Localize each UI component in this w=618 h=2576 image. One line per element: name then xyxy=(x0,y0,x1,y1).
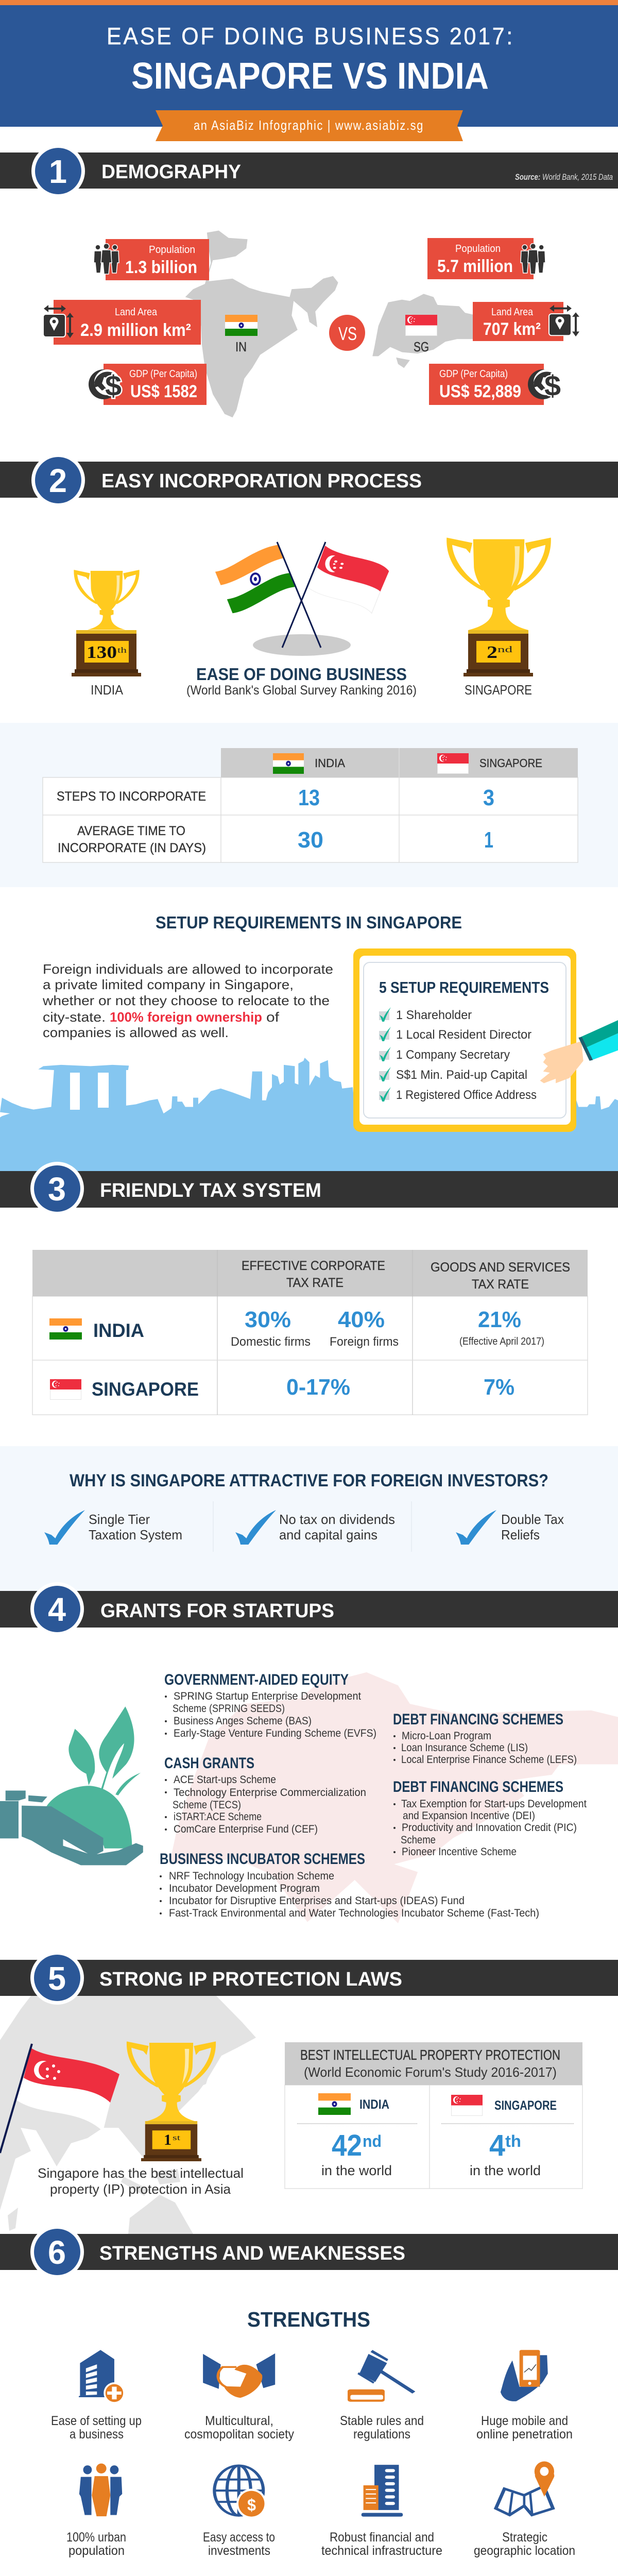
grants: business incubator schemes: NRF Technology Incubation Scheme xyxy=(169,1870,334,1882)
Singapore stat: land area xyxy=(473,302,579,341)
grants: tax schemes: and Expansion Incentive (DEI) xyxy=(403,1810,535,1822)
comparison table: AVERAGE TIME TO xyxy=(77,824,185,838)
tax comparison table: 0-17% xyxy=(286,1375,350,1400)
grants: cash grants xyxy=(164,1755,366,1835)
grants: business incubator schemes: Incubator Development Program xyxy=(169,1883,320,1894)
grants: business incubator schemes: Incubator for Disruptive Enterprises and Start-ups (IDEAS) Fund xyxy=(169,1895,465,1907)
reason: single tier: Single Tier xyxy=(89,1512,150,1527)
strength: multicultural xyxy=(184,2353,294,2442)
strength: access to investments xyxy=(203,2466,275,2558)
section 6 header: strengths and weaknesses xyxy=(0,2225,618,2279)
IP ranking table: 4 xyxy=(489,2129,505,2162)
strength: financial infrastructure xyxy=(321,2465,442,2558)
tax comparison table: 7% xyxy=(484,1375,514,1400)
ease of doing business caption xyxy=(186,665,417,698)
India stat: land area: 2.9 million km² xyxy=(80,320,191,340)
IP caption: Singapore has the best intellectual xyxy=(38,2165,244,2181)
IP ranking table: th xyxy=(505,2132,521,2150)
tax comparison table: (Effective April 2017) xyxy=(459,1336,544,1347)
map of India xyxy=(185,230,338,417)
strength: access to investments: Easy access to xyxy=(203,2530,275,2545)
grants: tax schemes: Scheme xyxy=(401,1834,436,1846)
Singapore stat: GDP: US$ 52,889 xyxy=(439,382,521,401)
reason: no tax on dividends: No tax on dividends xyxy=(279,1512,395,1527)
strength: financial infrastructure: technical infrastructure xyxy=(321,2544,442,2558)
India stat: GDP xyxy=(89,364,207,405)
strength: stable rules: regulations xyxy=(353,2427,410,2442)
setup paragraph: a private limited company in Singapore, xyxy=(43,977,294,992)
map of Singapore xyxy=(372,294,477,368)
grants: cash grants: ACE Start-ups Scheme xyxy=(174,1774,276,1786)
checklist: 1 Local Resident Director xyxy=(396,1028,531,1042)
tax comparison table: 21% xyxy=(478,1307,521,1332)
section 3 header: tax xyxy=(0,1162,618,1215)
header banner xyxy=(0,5,618,141)
India stat: GDP: GDP (Per Capita) xyxy=(129,368,197,380)
Singapore trophy: nd xyxy=(497,645,513,654)
comparison table: INDIA xyxy=(315,756,346,770)
Singapore stat: population: 5.7 million xyxy=(437,257,513,276)
grants: debt financing schemes xyxy=(393,1711,577,1766)
checklist: 1 Shareholder xyxy=(396,1008,472,1022)
section 2 header: incorporation xyxy=(0,453,618,507)
grants: debt financing schemes: DEBT FINANCING SCHEMES xyxy=(393,1711,563,1728)
tax comparison table: SINGAPORE xyxy=(92,1379,199,1400)
grants: cash grants: iSTART:ACE Scheme xyxy=(174,1811,262,1823)
strength: geographic location xyxy=(474,2462,575,2558)
panel: why Singapore is attractive xyxy=(0,1446,618,1591)
comparison table: 30 xyxy=(298,827,323,853)
reason: single tier: Taxation System xyxy=(89,1527,182,1543)
setup paragraph: of xyxy=(266,1009,280,1025)
strength: ease of setting up: a business xyxy=(70,2427,124,2442)
section 6 header: strengths and weaknesses: STRENGTHS AND WEAKNESSES xyxy=(99,2243,405,2264)
grants: government-aided equity xyxy=(164,1671,376,1739)
grants: cash grants: Technology Enterprise Commercialization xyxy=(174,1787,366,1799)
hand holding card xyxy=(540,1020,618,1083)
setup paragraph: 100% foreign ownership xyxy=(110,1009,262,1025)
strength: access to investments: $ xyxy=(247,2496,256,2514)
grants: tax schemes: Pioneer Incentive Scheme xyxy=(402,1846,517,1858)
comparison table: INCORPORATE (IN DAYS) xyxy=(58,841,206,855)
tax comparison table: 40% xyxy=(338,1307,385,1332)
comparison table xyxy=(43,748,578,862)
card heading: 5 SETUP REQUIREMENTS xyxy=(379,978,549,996)
India stat: population: Population xyxy=(149,244,195,256)
Singapore skyline xyxy=(0,1058,618,1171)
setup paragraph: Foreign individuals are allowed to incorporate xyxy=(43,961,333,977)
Singapore stat: land area: Land Area xyxy=(491,307,534,318)
comparison table: 3 xyxy=(483,785,494,810)
IP ranking table: 42 xyxy=(332,2129,362,2162)
section 3 header: tax: 3 xyxy=(48,1171,66,1208)
Singapore trophy: SINGAPORE xyxy=(465,682,532,698)
strength: multicultural: cosmopolitan society xyxy=(184,2427,294,2442)
setup requirements card xyxy=(353,948,576,1132)
setup requirements heading: SETUP REQUIREMENTS IN SINGAPORE xyxy=(156,913,462,932)
strength: geographic location: geographic location xyxy=(474,2544,575,2558)
strengths heading: STRENGTHS xyxy=(247,2308,370,2331)
title line 1: EASE OF DOING BUSINESS 2017: xyxy=(107,23,514,49)
Singapore trophy xyxy=(447,538,551,698)
tax comparison table: GOODS AND SERVICES xyxy=(431,1260,570,1275)
VS badge: VS xyxy=(338,323,357,344)
strength: mobile penetration: Huge mobile and xyxy=(481,2414,568,2428)
India stat: population xyxy=(94,239,209,280)
faint map of Asia xyxy=(0,1996,256,2234)
strength: geographic location: Strategic xyxy=(502,2530,547,2545)
IP ranking table: in the world xyxy=(470,2163,541,2178)
IP ranking table: SINGAPORE xyxy=(494,2098,557,2113)
IP caption: property (IP) protection in Asia xyxy=(50,2181,231,2197)
IP ranking table xyxy=(285,2042,582,2189)
first-place trophy xyxy=(127,2041,216,2161)
Singapore stat: population: Population xyxy=(455,243,501,255)
title line 2: SINGAPORE VS INDIA xyxy=(131,56,489,97)
strength: stable rules: Stable rules and xyxy=(340,2414,424,2428)
grants: cash grants: CASH GRANTS xyxy=(164,1755,254,1772)
tax comparison table: INDIA xyxy=(93,1320,144,1341)
section 5 header: IP protection: STRONG IP PROTECTION LAWS xyxy=(99,1969,402,1990)
strength: multicultural: Multicultural, xyxy=(205,2414,273,2428)
IP ranking table: nd xyxy=(363,2132,382,2150)
strength: ease of setting up xyxy=(51,2350,142,2442)
strength: urban population: population xyxy=(68,2544,125,2558)
strength: urban population: 100% urban xyxy=(66,2530,126,2545)
reason: single tier xyxy=(44,1510,182,1545)
Singapore flag and label xyxy=(405,315,437,354)
section 4 header: grants: GRANTS FOR STARTUPS xyxy=(100,1600,334,1622)
reason: double tax reliefs: Reliefs xyxy=(501,1527,540,1543)
India stat: population: 1.3 billion xyxy=(125,258,197,277)
reason: double tax reliefs xyxy=(456,1510,564,1545)
panel: incorporation comparison xyxy=(0,723,618,887)
Singapore stat: population xyxy=(427,238,545,279)
grants: tax schemes xyxy=(393,1778,587,1858)
grants: tax schemes: Productivity and Innovation Credit (PIC) xyxy=(402,1822,577,1834)
reason: no tax on dividends: and capital gains xyxy=(279,1527,377,1543)
Singapore stat: GDP xyxy=(429,364,561,405)
section 2 header: incorporation: 2 xyxy=(49,462,67,499)
strength: urban population xyxy=(66,2464,126,2558)
section 5 header: IP protection: 5 xyxy=(48,1960,66,1997)
IP ranking table: (World Economic Forum's Study 2016-2017) xyxy=(304,2064,557,2080)
large Singapore flag xyxy=(0,2044,119,2153)
strength: mobile penetration xyxy=(476,2350,573,2442)
checklist xyxy=(379,1007,537,1102)
grants: government-aided equity: Early-Stage Venture Funding Scheme (EVFS) xyxy=(174,1727,376,1739)
checklist: 1 Company Secretary xyxy=(396,1048,510,1062)
ease of doing business caption: (World Bank's Global Survey Ranking 2016) xyxy=(186,683,417,698)
panel heading: WHY IS SINGAPORE ATTRACTIVE FOR FOREIGN INVESTORS? xyxy=(70,1471,548,1490)
section 1 header: demography: 1 xyxy=(49,153,67,190)
comparison table: 13 xyxy=(298,785,320,810)
checklist: S$1 Min. Paid-up Capital xyxy=(396,1068,527,1082)
grants: cash grants: ComCare Enterprise Fund (CEF) xyxy=(174,1823,318,1835)
grants: government-aided equity: SPRING Startup Enterprise Development xyxy=(174,1690,361,1702)
tax comparison table: Domestic firms xyxy=(231,1335,311,1349)
grants: government-aided equity: Scheme (SPRING SEEDS) xyxy=(173,1703,285,1715)
grants: tax schemes: Tax Exemption for Start-ups Development xyxy=(401,1798,587,1810)
section 4 header: grants: 4 xyxy=(48,1591,66,1628)
tax comparison table: TAX RATE xyxy=(286,1276,344,1290)
tax comparison table xyxy=(32,1250,588,1415)
grants: cash grants: Scheme (TECS) xyxy=(173,1799,241,1811)
section 2 header: incorporation: EASY INCORPORATION PROCESS xyxy=(101,470,422,492)
section 1 header: demography xyxy=(0,144,618,198)
India flag and label: IN xyxy=(235,339,247,354)
IP ranking table: in the world xyxy=(321,2163,392,2178)
comparison table: SINGAPORE xyxy=(479,756,542,770)
tax comparison table: TAX RATE xyxy=(472,1277,529,1292)
tax comparison table: Foreign firms xyxy=(330,1335,399,1349)
comparison table: STEPS TO INCORPORATE xyxy=(57,789,206,804)
first-place trophy: 1 xyxy=(164,2131,171,2148)
crossed flags illustration xyxy=(215,542,389,656)
India stat: land area: Land Area xyxy=(115,307,158,318)
section 6 header: strengths and weaknesses: 6 xyxy=(48,2234,66,2271)
checklist: 1 Registered Office Address xyxy=(396,1088,537,1102)
setup paragraph: whether or not they choose to relocate to the xyxy=(42,993,330,1008)
strength: stable rules xyxy=(340,2350,424,2442)
strength: ease of setting up: Ease of setting up xyxy=(51,2414,142,2428)
comparison table: 1 xyxy=(484,827,493,853)
grants: tax schemes: DEBT FINANCING SCHEMES xyxy=(393,1778,563,1795)
section 4 header: grants xyxy=(0,1582,618,1636)
section 5 header: IP protection xyxy=(0,1951,618,2005)
faint Singapore map behind grants xyxy=(169,1672,618,1923)
India stat: GDP: US$ 1582 xyxy=(130,382,197,401)
Singapore stat: GDP: GDP (Per Capita) xyxy=(439,368,508,380)
top accent bar xyxy=(0,0,618,5)
grants: government-aided equity: GOVERNMENT-AIDED EQUITY xyxy=(164,1671,349,1688)
India stat: land area xyxy=(43,300,201,345)
Singapore flag and label: SG xyxy=(414,339,429,354)
setup paragraph xyxy=(42,961,333,1040)
India trophy: INDIA xyxy=(91,682,124,698)
strength: mobile penetration: online penetration xyxy=(476,2427,573,2442)
Singapore trophy: 2 xyxy=(487,643,497,662)
India trophy: th xyxy=(117,646,127,655)
grants: debt financing schemes: Micro-Loan Program xyxy=(402,1730,491,1742)
grants: business incubator schemes: BUSINESS INCUBATOR SCHEMES xyxy=(160,1851,365,1868)
reason: double tax reliefs: Double Tax xyxy=(501,1512,564,1527)
grants: debt financing schemes: Loan Insurance Scheme (LIS) xyxy=(401,1742,528,1754)
grants: business incubator schemes: Fast-Track Environmental and Water Technologies Incubator Scheme (Fast-Tech) xyxy=(169,1907,539,1919)
IP ranking table: INDIA xyxy=(359,2097,389,2112)
strength: access to investments: investments xyxy=(208,2544,270,2558)
icon: plant in hand xyxy=(0,1706,143,1865)
VS badge xyxy=(329,315,365,351)
first-place trophy: st xyxy=(173,2134,181,2142)
grants: business incubator schemes xyxy=(160,1851,539,1919)
section 1 header: demography: DEMOGRAPHY xyxy=(101,161,241,183)
grants: debt financing schemes: Local Enterprise Finance Scheme (LEFS) xyxy=(401,1754,577,1766)
section 3 header: tax: FRIENDLY TAX SYSTEM xyxy=(100,1180,321,1201)
India trophy xyxy=(72,570,141,698)
setup paragraph: city-state. xyxy=(43,1009,106,1025)
setup paragraph: companies is allowed as well. xyxy=(43,1025,229,1040)
ease of doing business caption: EASE OF DOING BUSINESS xyxy=(196,665,407,684)
grants: government-aided equity: Business Anges Scheme (BAS) xyxy=(174,1715,312,1727)
ribbon xyxy=(156,110,463,141)
reason: no tax on dividends xyxy=(235,1510,395,1545)
tax comparison table: EFFECTIVE CORPORATE xyxy=(242,1259,385,1273)
India trophy: 130 xyxy=(87,643,117,662)
ribbon: an AsiaBiz Infographic | www.asiabiz.sg xyxy=(194,117,424,133)
tax comparison table: 30% xyxy=(245,1307,291,1332)
India flag and label xyxy=(225,315,258,354)
strength: financial infrastructure: Robust financial and xyxy=(330,2530,434,2545)
IP caption xyxy=(38,2165,244,2197)
Singapore stat: land area: 707 km² xyxy=(483,319,541,339)
